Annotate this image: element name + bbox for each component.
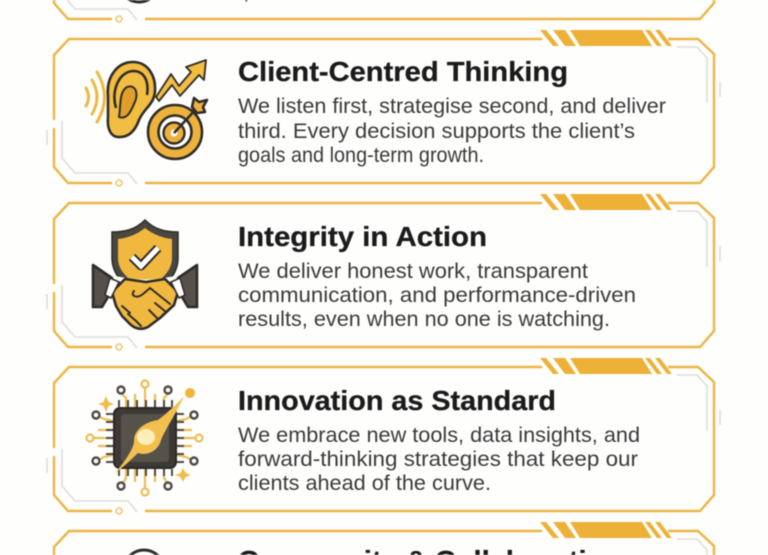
body text	[238, 424, 640, 495]
panel: top card (partial)	[47, 0, 720, 22]
body text: goals and long-term growth.	[238, 144, 484, 167]
body text	[238, 260, 636, 331]
body text: We listen first, strategise second, and deliver	[238, 95, 666, 118]
icon: partial top icon	[119, 0, 159, 2]
icon: partial circle	[124, 550, 164, 555]
body text: We embrace new tools, data insights, and	[238, 424, 640, 447]
body text: third. Every decision supports the client’s	[238, 120, 635, 143]
frame	[47, 522, 720, 555]
panel: Integrity in Action	[47, 194, 720, 350]
panel: Innovation as Standard	[47, 358, 720, 514]
body text: forward-thinking strategies that keep our	[238, 448, 638, 471]
body text	[238, 95, 666, 167]
panel: Community & Collaboration (partial)	[47, 522, 720, 555]
body text: We deliver honest work, transparent	[238, 260, 588, 283]
icon: ear, growth arrow and target	[86, 60, 207, 159]
frame	[47, 194, 720, 350]
icon: glowing microchip	[86, 380, 202, 496]
frame	[47, 30, 720, 186]
heading: Innovation as Standard	[238, 385, 556, 416]
frame	[47, 358, 720, 514]
body text: clients ahead of the curve.	[238, 472, 491, 495]
body text: results, even when no one is watching.	[238, 308, 610, 331]
panel: Client-Centred Thinking	[47, 30, 720, 186]
icon: shield and handshake	[93, 220, 197, 329]
heading: Client-Centred Thinking	[238, 56, 568, 87]
body text: communication, and performance-driven	[238, 284, 636, 307]
heading: Integrity in Action	[238, 221, 487, 252]
